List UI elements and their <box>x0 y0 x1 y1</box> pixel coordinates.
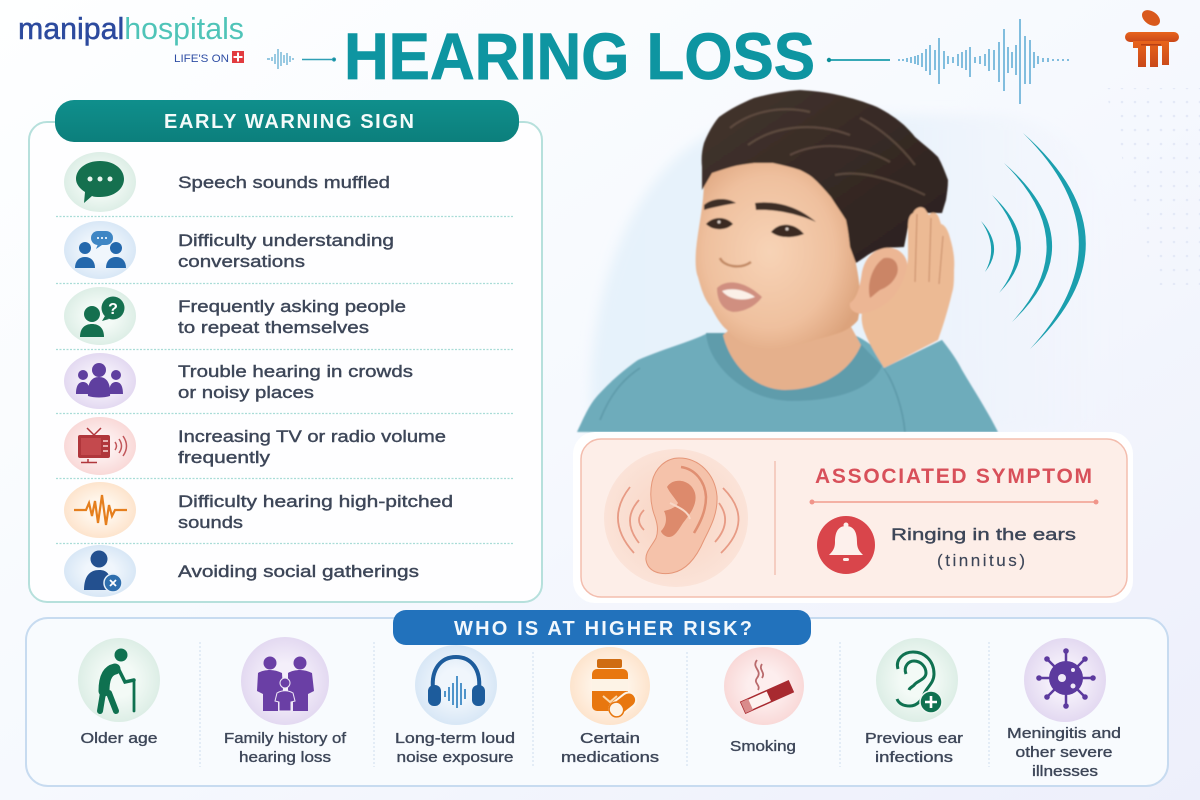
panel outline <box>29 122 542 602</box>
icon: pill bottle <box>570 647 650 725</box>
row: difficulty hearing high-pitched sounds <box>64 482 453 538</box>
label: sounds <box>178 513 243 532</box>
collar <box>706 333 882 401</box>
label <box>224 731 347 766</box>
label: Certain <box>580 731 640 747</box>
panel header pill <box>393 610 811 645</box>
hand <box>862 207 954 368</box>
label <box>395 731 515 766</box>
icon: family silhouette <box>241 637 329 725</box>
label <box>1007 726 1121 780</box>
label: Family history of <box>224 731 347 747</box>
sleeve cuff <box>884 340 960 402</box>
panel outline <box>26 618 1168 786</box>
white frame and card <box>573 432 1133 603</box>
neck <box>723 325 861 390</box>
panel header pill <box>55 100 519 142</box>
panel: early warning signs <box>29 100 542 602</box>
risk: loud noise <box>395 645 515 766</box>
logo wordmark: manipalhospitals <box>18 11 244 46</box>
label: Difficulty hearing high-pitched <box>178 492 453 511</box>
icon: cigarette <box>724 647 804 725</box>
icon: bell <box>817 516 875 574</box>
label <box>178 492 453 532</box>
sound waves arcs <box>981 133 1086 349</box>
logo red cross <box>232 51 244 63</box>
icon: ear with plus <box>876 638 958 722</box>
illustration: boy cupping his ear <box>577 90 998 432</box>
risk: older age <box>78 638 160 747</box>
risk: meningitis <box>1007 638 1121 780</box>
row: increasing TV volume <box>64 417 446 475</box>
label: medications <box>561 750 659 766</box>
icon: speech bubble <box>64 152 136 212</box>
left small waveform with arrow <box>267 49 336 69</box>
risk: medications <box>561 647 659 766</box>
title: HEARING LOSS <box>344 19 815 93</box>
icon: orange waveform <box>64 482 136 538</box>
eyes <box>706 218 733 229</box>
hair <box>702 90 948 263</box>
row: difficulty understanding conversations <box>64 221 394 279</box>
face <box>696 155 860 349</box>
row: speech sounds muffled <box>64 152 390 212</box>
label: Older age <box>80 731 158 747</box>
icon: crowd <box>64 353 136 409</box>
label: frequently <box>178 448 271 467</box>
background blob behind the boy <box>590 115 1117 432</box>
nose <box>720 258 751 266</box>
icon: virus <box>1024 638 1106 722</box>
logo tagline: LIFE'S ON <box>174 53 229 65</box>
mouth <box>717 282 762 312</box>
risk: smoking <box>724 647 804 755</box>
panel: associated symptom <box>573 432 1133 603</box>
label: illnesses <box>1032 764 1098 780</box>
label: hearing loss <box>239 750 331 766</box>
logo: Manipal Hospitals <box>18 11 244 65</box>
symptom text: (tinnitus) <box>937 551 1025 570</box>
label: or noisy places <box>178 383 314 402</box>
panel header pill: EARLY WARNING SIGN <box>164 111 414 133</box>
label: noise exposure <box>396 750 514 766</box>
icon: two people talking <box>64 221 136 279</box>
label <box>178 362 413 402</box>
icon: headphones <box>415 645 497 725</box>
ear <box>850 248 908 314</box>
label: Avoiding social gatherings <box>178 562 419 581</box>
label: Meningitis and <box>1007 726 1121 742</box>
label: Increasing TV or radio volume <box>178 427 446 446</box>
row: frequently asking people to repeat <box>64 287 406 345</box>
label: other severe <box>1016 745 1112 761</box>
symptom text: Ringing in the ears <box>891 525 1076 544</box>
label: Frequently asking people <box>178 297 406 316</box>
label <box>865 731 963 766</box>
risk: family history <box>224 637 347 766</box>
icon: ear with sound waves <box>604 449 748 587</box>
risk: ear infections <box>865 638 963 766</box>
logo: orange figure emblem <box>1125 7 1179 67</box>
label: Trouble hearing in crowds <box>178 362 413 381</box>
label <box>178 231 394 271</box>
symptom heading: ASSOCIATED SYMPTOM <box>815 465 1092 488</box>
panel header pill: WHO IS AT HIGHER RISK? <box>454 618 752 640</box>
label <box>178 427 446 467</box>
icon: television with sound <box>64 417 136 475</box>
heading rule <box>810 500 1098 504</box>
icon: person with question bubble: ? <box>108 301 118 318</box>
label: Previous ear <box>865 731 963 747</box>
label: Difficulty understanding <box>178 231 394 250</box>
label: infections <box>875 750 953 766</box>
symptom text <box>891 525 1076 570</box>
panel: who is at higher risk <box>26 610 1168 786</box>
eyebrows <box>704 199 816 222</box>
icon: person with cross badge <box>64 545 136 597</box>
right waveform with line <box>827 19 1068 104</box>
label <box>561 731 659 766</box>
sweater <box>577 333 998 432</box>
row: avoiding social gatherings <box>64 545 419 597</box>
label: Speech sounds muffled <box>178 173 390 192</box>
label: Smoking <box>730 739 796 755</box>
label <box>178 297 406 337</box>
icon: elderly person with cane <box>78 638 160 722</box>
label: Long-term loud <box>395 731 515 747</box>
row: trouble hearing in crowds <box>64 353 413 409</box>
label: to repeat themselves <box>178 318 369 337</box>
icon: person with question bubble <box>64 287 136 345</box>
label: conversations <box>178 252 305 271</box>
